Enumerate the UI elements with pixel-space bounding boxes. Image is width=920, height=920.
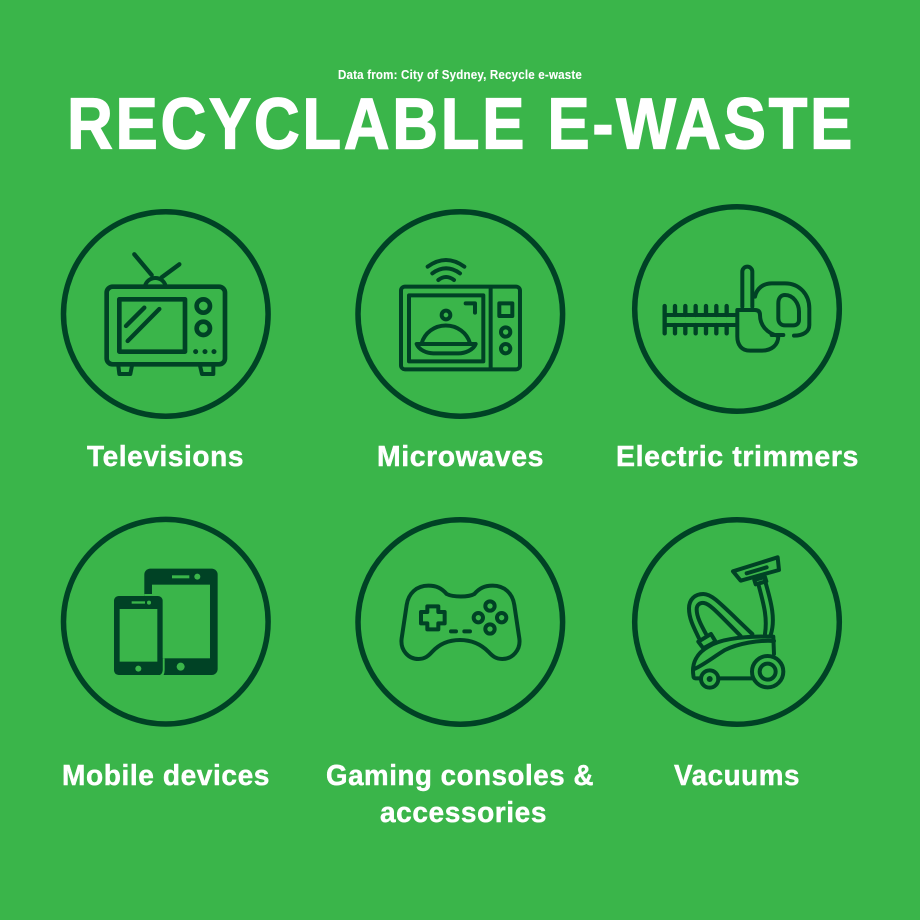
panel: vacuums (635, 520, 839, 792)
label: microwaves: Microwaves (377, 441, 544, 473)
icon ring: gaming consoles (358, 520, 563, 724)
icon: game controller (401, 586, 520, 659)
icon: hedge trimmer (665, 267, 809, 351)
icon ring: televisions (64, 212, 268, 416)
icon ring: mobile devices (64, 519, 268, 724)
panel: electric trimmers (616, 207, 859, 473)
icon ring: microwaves (358, 212, 563, 416)
icon: tablet and phone (114, 569, 218, 676)
label: vacuums: Vacuums (674, 760, 800, 792)
panel: mobile devices (62, 519, 270, 792)
label: gaming consoles and accessories: Gaming consoles & (326, 760, 594, 792)
label: televisions: Televisions (87, 441, 244, 473)
panel: gaming consoles (326, 520, 594, 829)
label: gaming consoles and accessories (326, 760, 594, 829)
label: electric trimmers: Electric trimmers (616, 441, 859, 473)
panel: microwaves (358, 212, 563, 473)
icon ring: electric trimmers (635, 207, 839, 411)
icon: television (107, 254, 225, 374)
panel: televisions (64, 212, 268, 473)
source note: Data from: City of Sydney, Recycle e-waste (338, 68, 582, 82)
icon: microwave (401, 260, 520, 369)
label: gaming consoles and accessories: accessories (380, 797, 547, 829)
icon: vacuum cleaner (689, 557, 783, 688)
label: mobile devices: Mobile devices (62, 760, 270, 792)
icon ring: vacuums (635, 520, 839, 724)
